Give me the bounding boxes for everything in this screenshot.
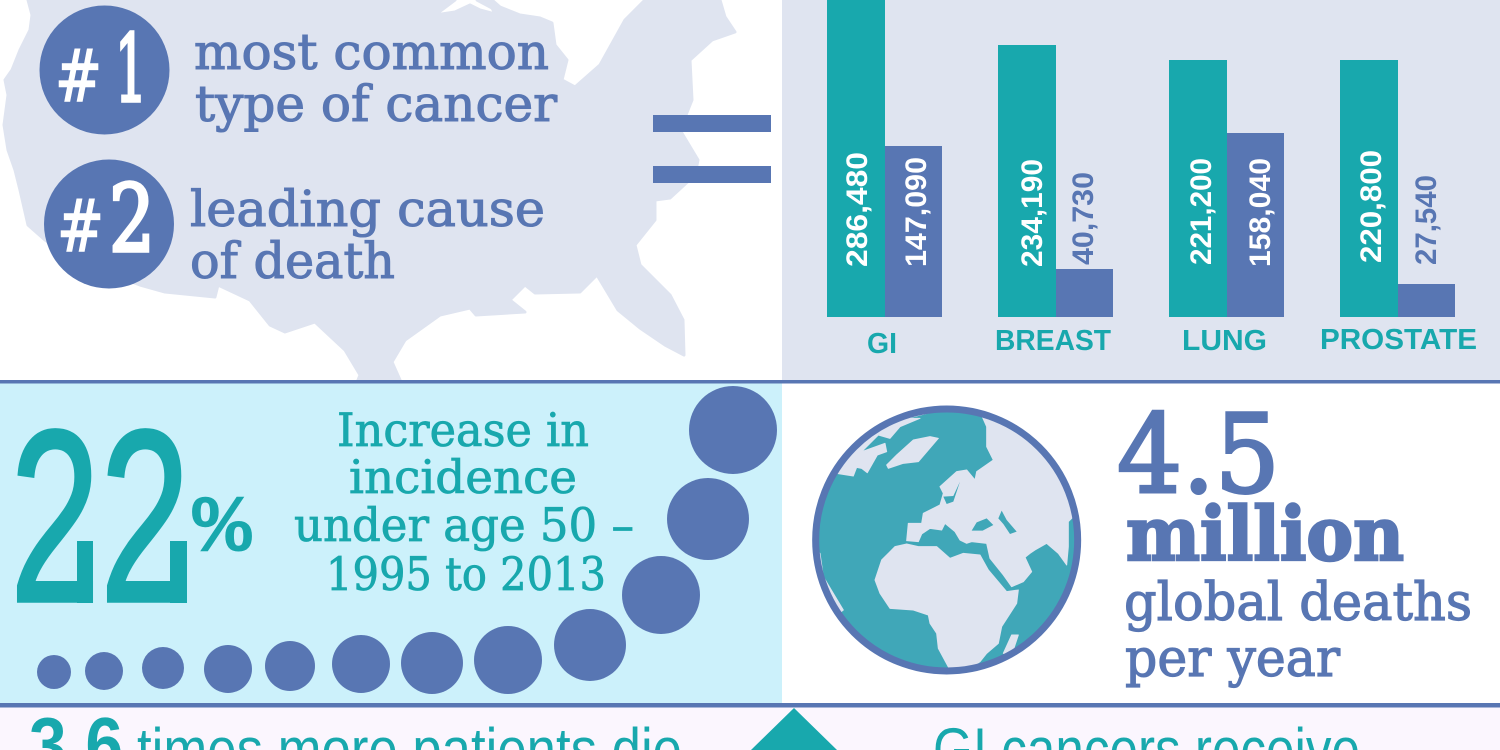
- text: most common type of cancer: type of cancer: [195, 75, 557, 133]
- text: leading cause of death: of death: [190, 232, 395, 290]
- text: global deaths per year: global deaths: [1124, 573, 1472, 633]
- badge: number two: [44, 160, 174, 288]
- badge: number two: 2: [109, 165, 155, 273]
- panel: bottom comparison strip: [0, 702, 1500, 750]
- statistic: 4.5 million: million: [1126, 492, 1404, 578]
- text: leading cause of death: leading cause: [190, 180, 545, 238]
- text: 3.6 times more patients die: [29, 702, 682, 750]
- panel: 22 percent increase: [0, 379, 782, 703]
- badge: number one: #: [55, 34, 102, 118]
- text: global deaths per year: [1124, 573, 1472, 689]
- bars: breast: 234,190: [1016, 159, 1049, 267]
- icon: teal triangle: [751, 708, 837, 750]
- equals sign: [653, 115, 771, 183]
- text: increase in incidence: under age 50 –: [294, 498, 634, 552]
- text: global deaths per year: per year: [1125, 629, 1340, 689]
- bars: prostate: 220,800: [1355, 150, 1388, 263]
- panel: bar chart of incidence and deaths: [782, 0, 1500, 380]
- text: increase in incidence: incidence: [349, 450, 577, 504]
- badge: number one: 1: [115, 15, 147, 123]
- bars: GI: 147,090: [900, 157, 933, 267]
- dots: rising curve: [37, 386, 777, 694]
- text: increase in incidence: Increase in: [337, 403, 589, 457]
- text: increase in incidence: 1995 to 2013: [326, 547, 606, 601]
- bars: GI: [827, 0, 942, 360]
- statistic: 22 percent: 22: [10, 379, 190, 653]
- panel: global deaths: [810, 391, 1472, 689]
- bars: lung: 221,200: [1185, 158, 1218, 265]
- text: leading cause of death: [190, 180, 545, 290]
- statistic: 4.5 million: 4.5: [1117, 391, 1280, 518]
- bars: prostate: PROSTATE: [1320, 324, 1477, 356]
- bars: breast: [995, 45, 1113, 357]
- bars: breast: BREAST: [995, 325, 1111, 357]
- map: United States: [4, 0, 735, 380]
- text: most common type of cancer: most common: [194, 23, 549, 81]
- bars: lung: 158,040: [1244, 158, 1277, 267]
- bars: prostate: [1320, 60, 1477, 356]
- panel: US statistics: [4, 0, 735, 380]
- bars: GI: 286,480: [841, 152, 874, 267]
- icon: globe: [810, 403, 1083, 672]
- bars: GI: GI: [867, 328, 897, 360]
- badge: number one: [40, 6, 170, 134]
- bars: prostate: 27,540: [1410, 175, 1443, 265]
- text: most common type of cancer: [194, 23, 557, 133]
- bars: lung: [1169, 60, 1284, 357]
- text: increase in incidence: [294, 403, 634, 601]
- statistic: 4.5 million: [1117, 391, 1404, 578]
- statistic: 22 percent: %: [191, 482, 253, 566]
- bars: lung: LUNG: [1182, 325, 1267, 357]
- badge: number two: #: [57, 184, 104, 268]
- section rules: [0, 380, 1500, 708]
- bars: breast: 40,730: [1067, 172, 1100, 265]
